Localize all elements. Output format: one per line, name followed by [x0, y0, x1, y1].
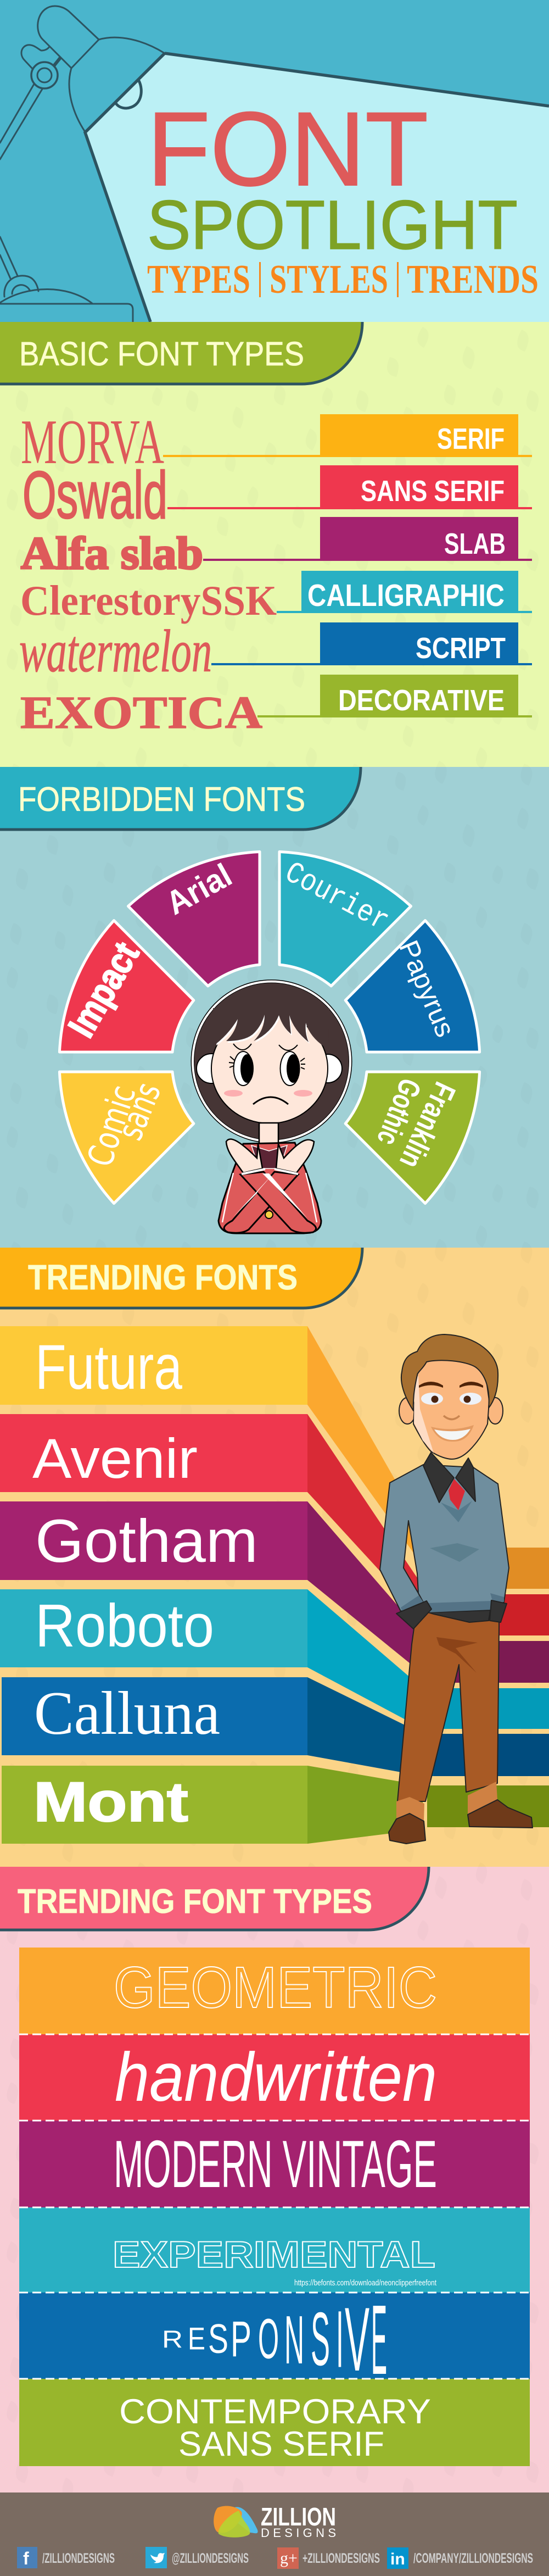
band: responsive: O [258, 2308, 279, 2371]
bar: Avenir [0, 1414, 307, 1492]
band: contemporary sans serif: CONTEMPORARY [119, 2393, 431, 2431]
spotlight beam [85, 53, 549, 322]
band: responsive: S [311, 2297, 330, 2382]
wheel labels: Papyrus [393, 936, 461, 1042]
wheel labels: Arial [160, 856, 238, 922]
wheel labels: Comic [80, 1081, 144, 1171]
heading: trending font types: TRENDING FONT TYPES [18, 1883, 372, 1921]
band: handwritten: handwritten [115, 2039, 437, 2116]
logo wordmark: DESIGNS [261, 2526, 336, 2540]
icon: zillion designs logo [214, 2506, 258, 2538]
social: google plus: g+ [280, 2549, 298, 2567]
band: geometric [19, 1948, 530, 2034]
logo wordmark [261, 2502, 336, 2540]
band: responsive: I [336, 2295, 344, 2385]
band: contemporary sans serif [19, 2379, 530, 2466]
bar: Futura: Futura [35, 1332, 182, 1403]
heading: forbidden fonts: FORBIDDEN FONTS [18, 781, 305, 819]
band: responsive: S [208, 2316, 228, 2362]
icon: desk lamp [0, 6, 165, 322]
social: facebook [17, 2547, 115, 2568]
bar: Gotham: Gotham [35, 1507, 258, 1575]
social: linkedin: in [390, 2550, 405, 2568]
bar: Avenir: Avenir [32, 1427, 198, 1490]
band: experimental: EXPERIMENTAL [113, 2234, 435, 2275]
row: script: SCRIPT [416, 632, 506, 665]
bands behind figure [307, 1326, 549, 1844]
heading: basic font types: BASIC FONT TYPES [19, 335, 304, 372]
wheel labels: Franklin [393, 1077, 463, 1174]
band: responsive: V [345, 2289, 369, 2390]
bar: Mont: Mont [33, 1771, 188, 1833]
title [147, 91, 518, 264]
band: experimental [19, 2207, 530, 2293]
social: linkedin [387, 2547, 533, 2569]
wheel labels: sans [110, 1077, 169, 1145]
band: responsive [19, 2284, 530, 2395]
social: twitter [145, 2547, 249, 2568]
title: FONT [147, 91, 428, 208]
band: modern vintage [19, 2121, 530, 2207]
band: responsive: E [188, 2322, 205, 2357]
bar: Futura [0, 1326, 307, 1405]
social: twitter: @ZILLIONDESIGNS [172, 2551, 249, 2566]
panel: trending fonts [0, 1248, 549, 1867]
wheel labels: Gothic [371, 1074, 428, 1150]
panel: hero with desk lamp [0, 0, 549, 322]
bar: Mont [2, 1766, 307, 1844]
row: slab: Alfa slab [21, 528, 203, 579]
social: facebook: /ZILLIONDESIGNS [42, 2551, 115, 2566]
row: decorative [20, 675, 532, 738]
beam edges [85, 53, 549, 322]
icon: smiling man [380, 1334, 533, 1844]
band: responsive: R [162, 2326, 183, 2353]
band: geometric: GEOMETRIC [114, 1955, 437, 2020]
social: facebook: f [23, 2549, 29, 2568]
heading: trending fonts [0, 1248, 362, 1308]
row: decorative: EXOTICA [20, 687, 262, 738]
panel: forbidden fonts [0, 767, 549, 1248]
wheel labels [60, 855, 463, 1174]
row: sans serif: SANS SERIF [361, 475, 505, 508]
band: contemporary sans serif: SANS SERIF [178, 2425, 384, 2463]
row: slab: SLAB [444, 527, 506, 560]
row: serif [21, 407, 532, 477]
bar: Roboto [0, 1589, 307, 1667]
panel: basic font types [0, 322, 549, 767]
social: google plus: +ZILLIONDESIGNS [302, 2551, 380, 2566]
heading: trending font types [0, 1867, 429, 1930]
bar: Gotham [0, 1501, 307, 1580]
row: sans serif [23, 458, 532, 532]
logo wordmark: ZILLION [261, 2502, 336, 2531]
band: responsive: P [231, 2311, 251, 2367]
heading: basic font types [0, 322, 362, 384]
row: sans serif: Oswald [23, 458, 167, 532]
panel: footer [0, 2492, 549, 2576]
row: calligraphic: ClerestorySSK [20, 577, 277, 624]
bar: Roboto: Roboto [35, 1592, 214, 1660]
bar: Calluna [2, 1677, 307, 1755]
row: serif: MORVA [21, 407, 164, 477]
row: calligraphic: CALLIGRAPHIC [307, 578, 505, 613]
title: SPOTLIGHT [147, 186, 518, 264]
row: decorative: DECORATIVE [338, 684, 505, 717]
row: script: watermelon [19, 617, 212, 685]
band: experimental: https://befonts.com/download/neonclipperfreefont [294, 2279, 436, 2288]
wheel labels: Impact [60, 935, 147, 1044]
bar: Calluna: Calluna [34, 1679, 220, 1748]
band: responsive: E [371, 2284, 387, 2395]
subtitle [147, 257, 539, 302]
panel: trending font types [0, 1867, 549, 2492]
row: script [19, 617, 532, 685]
subtitle: STYLES [270, 257, 388, 302]
row: serif: SERIF [437, 422, 505, 455]
row: calligraphic [20, 571, 532, 624]
heading: trending fonts: TRENDING FONTS [28, 1258, 298, 1297]
social: google plus [277, 2547, 380, 2569]
heading: forbidden fonts [0, 767, 361, 830]
wheel labels: Courier [279, 855, 395, 939]
band: handwritten [19, 2034, 530, 2121]
band: responsive: N [284, 2302, 304, 2379]
icon: worried girl crossing arms [191, 980, 352, 1233]
chart: forbidden font wheel [59, 852, 480, 1203]
row: slab [21, 517, 532, 579]
subtitle: TYPES [147, 257, 250, 302]
